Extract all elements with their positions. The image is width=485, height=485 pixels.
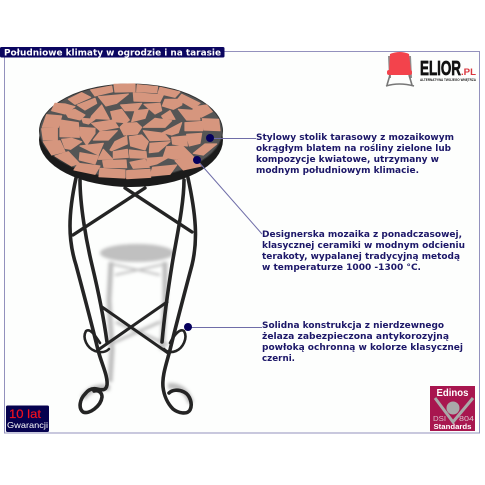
mosaic tiles bbox=[42, 84, 220, 179]
text block: konstrukcja: żelaza zabezpieczona antykorozyjną bbox=[262, 332, 449, 342]
badge: 10 lat gwarancji bbox=[6, 406, 49, 432]
badge: Edinos DSI 804 Standards: 804 bbox=[459, 414, 474, 423]
text block: mozaika bbox=[262, 230, 465, 273]
marker dots bbox=[184, 134, 214, 331]
badge: Edinos DSI 804 Standards bbox=[430, 386, 475, 431]
badge: Edinos DSI 804 Standards: DSI bbox=[433, 414, 446, 423]
text block: mozaika: w temperaturze 1000 -1300 °C. bbox=[262, 263, 421, 273]
lower cross brace bbox=[98, 302, 168, 353]
text block: stolik: okrągłym blatem na rośliny zielone lub bbox=[256, 143, 452, 154]
badge: 10 lat gwarancji: 10 lat bbox=[9, 407, 42, 421]
middle ring bbox=[98, 94, 128, 106]
text block: konstrukcja: Solidna konstrukcja z nierdzewnego bbox=[262, 321, 444, 331]
text block: stolik bbox=[256, 133, 454, 176]
left inner leg bbox=[80, 180, 107, 342]
badge: Edinos DSI 804 Standards: Standards bbox=[434, 422, 472, 431]
table top bbox=[39, 84, 223, 187]
text block: mozaika: klasycznej ceramiki w modnym odcieniu bbox=[262, 241, 465, 251]
logo: Elior: ELIOR bbox=[420, 58, 461, 80]
table legs bbox=[70, 178, 195, 413]
upper cross brace bbox=[73, 188, 192, 235]
text block: konstrukcja bbox=[262, 321, 463, 364]
text block: konstrukcja: powłoką ochronną w kolorze klasycznej bbox=[262, 343, 463, 353]
text block: mozaika: Designerska mozaika z ponadczasowej, bbox=[262, 230, 462, 240]
text block: stolik: modnym południowym klimacie. bbox=[256, 166, 419, 176]
connector lines bbox=[188, 138, 262, 328]
right small curl bbox=[164, 330, 185, 352]
right outer leg with curled foot bbox=[163, 178, 195, 413]
left small curl bbox=[85, 330, 109, 352]
badge: Edinos DSI 804 Standards: Edinos bbox=[436, 388, 469, 399]
chair icon bbox=[386, 52, 414, 86]
frame bbox=[4, 52, 480, 433]
inner ring bbox=[82, 118, 95, 124]
rim bbox=[39, 93, 223, 187]
title bar: Południowe klimaty w ogrodzie i na tarasie bbox=[4, 48, 221, 58]
right inner leg bbox=[162, 180, 184, 342]
logo: Elior: .PL bbox=[461, 67, 477, 77]
left outer leg with curled foot bbox=[70, 178, 107, 413]
text block: konstrukcja: czerni. bbox=[262, 354, 295, 364]
text block: stolik: Stylowy stolik tarasowy z mozaikowym bbox=[256, 133, 454, 143]
outer ring bbox=[91, 86, 113, 96]
text block: mozaika: terakoty, wypalanej tradycyjną metodą bbox=[262, 252, 460, 262]
badge: 10 lat gwarancji: Gwarancji bbox=[7, 420, 48, 430]
grout surface bbox=[40, 84, 222, 178]
text block: stolik: kompozycje kwiatowe, utrzymany w bbox=[256, 155, 439, 165]
floor shadow of table bbox=[83, 244, 191, 403]
logo: Elior bbox=[386, 52, 477, 86]
